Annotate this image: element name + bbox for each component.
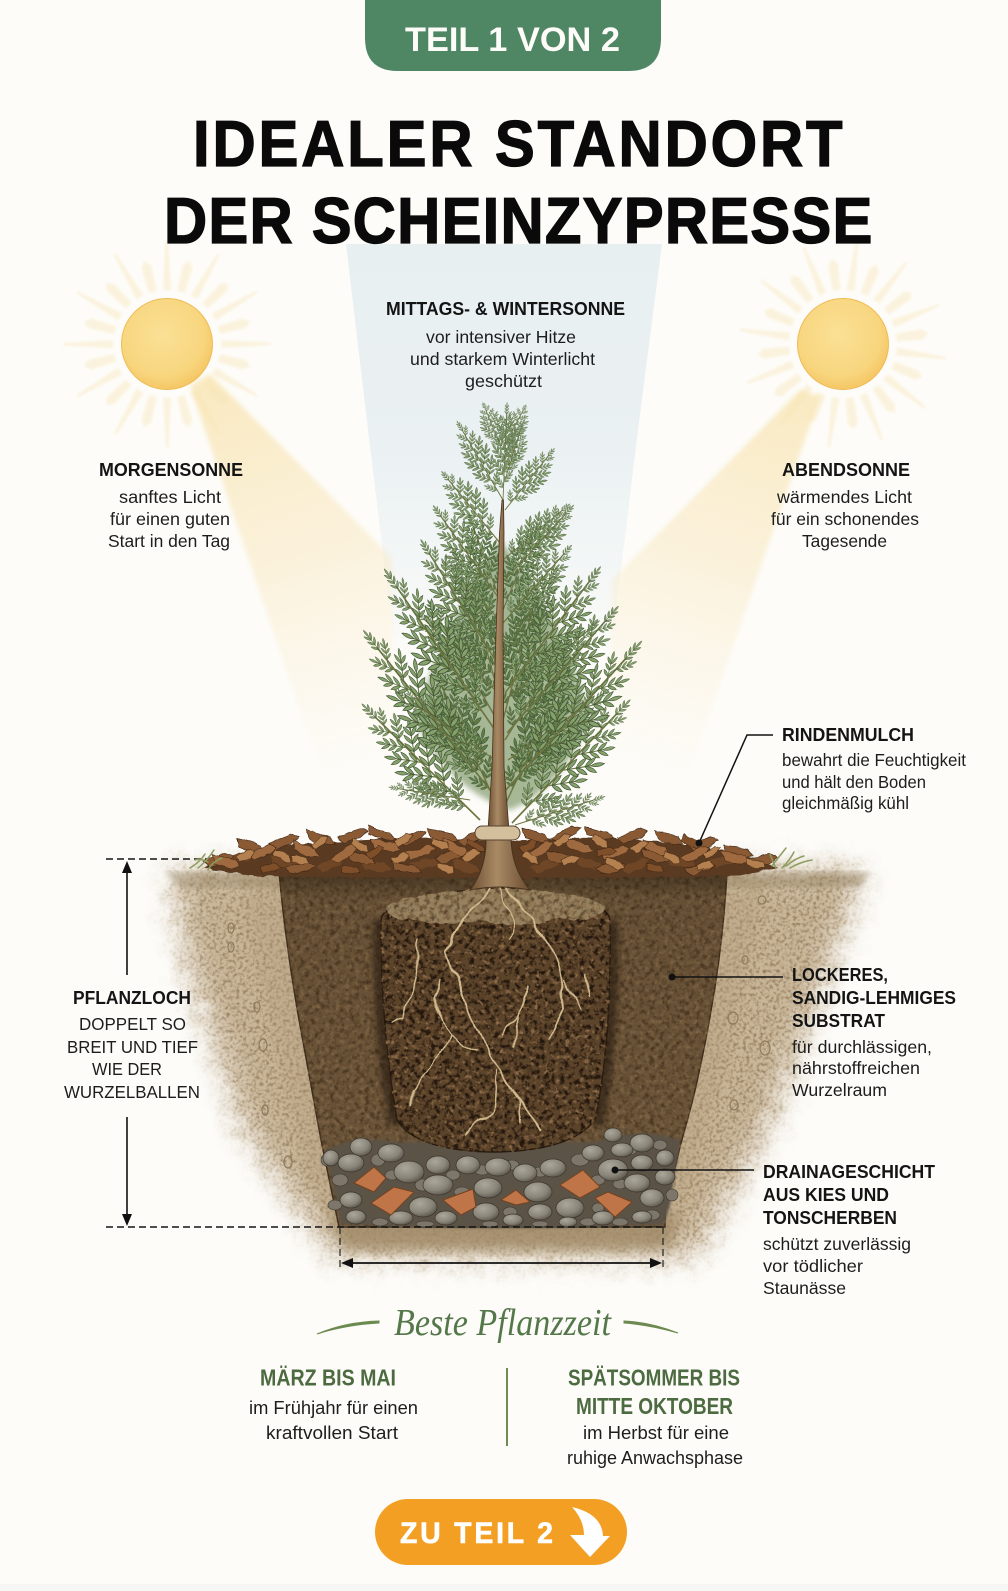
text: spring window: im Frühjahr für einen bbox=[249, 1398, 418, 1418]
text: planting hole: DOPPELT SO bbox=[79, 1014, 186, 1034]
button: to part 2: ZU TEIL 2 bbox=[400, 1517, 553, 1550]
text: planting hole: WURZELBALLEN bbox=[64, 1082, 200, 1102]
text: midday and winter sun: vor intensiver Hitze bbox=[426, 327, 576, 347]
title: DER SCHEINZYPRESSE bbox=[164, 185, 872, 258]
icon: curved arrow bbox=[570, 1507, 610, 1557]
button: to part 2 bbox=[375, 1499, 627, 1565]
text: planting hole bbox=[64, 987, 200, 1102]
text: substrate: LOCKERES, bbox=[792, 964, 888, 985]
evening sun beam bbox=[606, 390, 820, 800]
mulch layer bbox=[202, 823, 779, 878]
text: bark mulch: gleichmäßig kühl bbox=[782, 793, 909, 813]
soil near hole bbox=[235, 872, 770, 1245]
midday sun beam bbox=[346, 244, 662, 660]
text: midday and winter sun bbox=[386, 298, 625, 391]
soil pebbles bbox=[228, 896, 770, 1168]
tab: part indicator bbox=[365, 0, 661, 71]
text: spring window bbox=[249, 1364, 418, 1443]
text: substrate: für durchlässigen, bbox=[792, 1037, 932, 1057]
heading: best planting time: Beste Pflanzzeit bbox=[394, 1302, 612, 1344]
dashed height guides bbox=[106, 859, 662, 1227]
text: midday and winter sun: geschützt bbox=[465, 371, 542, 391]
surrounding soil bbox=[172, 872, 862, 1255]
text: drainage: schützt zuverlässig bbox=[763, 1234, 911, 1254]
leader: substrate bbox=[668, 974, 783, 980]
planting hole bbox=[279, 872, 727, 1227]
text: spring window: kraftvollen Start bbox=[266, 1423, 398, 1443]
pottery shards bbox=[354, 1167, 632, 1217]
text: substrate: Wurzelraum bbox=[792, 1080, 887, 1100]
text: substrate: nährstoffreichen bbox=[792, 1058, 920, 1078]
text: spring window: MÄRZ BIS MAI bbox=[260, 1364, 396, 1390]
tab: part indicator: TEIL 1 VON 2 bbox=[405, 21, 620, 59]
heading: best planting time bbox=[317, 1302, 678, 1344]
tree foliage bbox=[337, 396, 667, 846]
text: evening sun: wärmendes Licht bbox=[776, 487, 912, 507]
leader: bark mulch bbox=[696, 735, 773, 846]
text: evening sun: ABENDSONNE bbox=[782, 459, 910, 480]
text: drainage: vor tödlicher bbox=[763, 1256, 863, 1276]
icon: morning sun bbox=[63, 240, 271, 448]
soil below gravel bbox=[325, 1215, 680, 1250]
text: evening sun: für ein schonendes bbox=[771, 509, 919, 529]
soil surface band bbox=[165, 872, 870, 888]
root ball bbox=[381, 885, 610, 1152]
roots bbox=[391, 885, 590, 1137]
text: autumn window: MITTE OKTOBER bbox=[576, 1393, 733, 1419]
text: planting hole: PFLANZLOCH bbox=[73, 987, 191, 1008]
text: bark mulch bbox=[782, 724, 966, 813]
text: bark mulch: bewahrt die Feuchtigkeit bbox=[782, 750, 966, 770]
leader: drainage bbox=[612, 1166, 754, 1174]
text: morning sun bbox=[99, 459, 243, 551]
dense foliage mass bbox=[415, 540, 590, 810]
text: bark mulch: und hält den Boden bbox=[782, 772, 926, 792]
arrow: hole width bbox=[340, 1227, 663, 1270]
text: bark mulch: RINDENMULCH bbox=[782, 724, 914, 745]
text: substrate: SUBSTRAT bbox=[792, 1010, 886, 1031]
text: drainage bbox=[763, 1161, 936, 1298]
title bbox=[164, 108, 872, 258]
hole top shade bbox=[279, 872, 727, 1147]
text: morning sun: MORGENSONNE bbox=[99, 459, 243, 480]
text: morning sun: Start in den Tag bbox=[108, 531, 230, 551]
grass tufts bbox=[190, 848, 812, 870]
text: drainage: AUS KIES UND bbox=[763, 1184, 889, 1205]
morning sun beam bbox=[190, 374, 396, 800]
tree trunk lower bbox=[470, 836, 530, 890]
text: evening sun bbox=[771, 459, 919, 551]
bottom edge strip bbox=[0, 1584, 1008, 1591]
text: autumn window: SPÄTSOMMER BIS bbox=[568, 1364, 740, 1390]
title: IDEALER STANDORT bbox=[193, 108, 843, 181]
text: substrate: SANDIG-LEHMIGES bbox=[792, 987, 956, 1008]
text: drainage: Staunässe bbox=[763, 1278, 846, 1298]
text: midday and winter sun: MITTAGS- & WINTERSONNE bbox=[386, 298, 625, 319]
drainage layer bbox=[321, 1128, 680, 1228]
text: planting hole: BREIT UND TIEF bbox=[67, 1037, 198, 1057]
icon: evening sun bbox=[726, 227, 960, 461]
text: planting hole: WIE DER bbox=[92, 1059, 162, 1079]
divider bbox=[506, 1368, 508, 1446]
text: evening sun: Tagesende bbox=[802, 531, 887, 551]
text: autumn window: ruhige Anwachsphase bbox=[567, 1448, 743, 1468]
text: autumn window: im Herbst für eine bbox=[583, 1423, 729, 1443]
text: drainage: TONSCHERBEN bbox=[763, 1207, 897, 1228]
text: drainage: DRAINAGESCHICHT bbox=[763, 1161, 936, 1182]
text: morning sun: für einen guten bbox=[110, 509, 230, 529]
text: midday and winter sun: und starkem Winterlicht bbox=[410, 349, 595, 369]
trunk tie bbox=[475, 826, 520, 840]
text: autumn window bbox=[567, 1364, 743, 1468]
text: morning sun: sanftes Licht bbox=[119, 487, 221, 507]
shadow of root ball bbox=[381, 920, 610, 1125]
arrow: hole depth bbox=[122, 861, 132, 1226]
tree trunk upper bbox=[488, 500, 509, 830]
text: substrate bbox=[792, 964, 956, 1100]
root ball top bbox=[385, 888, 606, 925]
